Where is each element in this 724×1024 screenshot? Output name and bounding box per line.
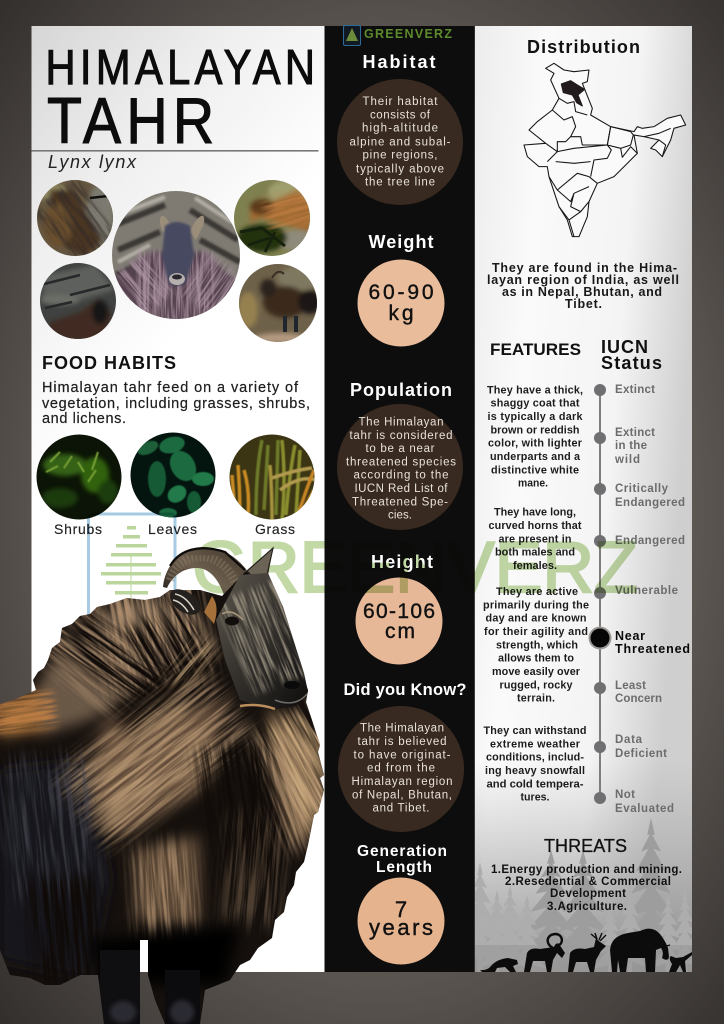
photo: grass bbox=[229, 434, 316, 520]
circle: habitat text: pine regions, bbox=[362, 149, 438, 161]
text: distribution description: Tibet. bbox=[565, 297, 602, 311]
circle: population text: to be a near bbox=[366, 443, 435, 455]
divider under title bbox=[32, 150, 318, 152]
logo: Greenverz bbox=[344, 26, 452, 46]
heading: weight: Weight bbox=[368, 232, 434, 252]
text: feature activity: They are active bbox=[496, 586, 578, 598]
circle: generation length value: 7 bbox=[395, 897, 407, 922]
soft colour masses bbox=[0, 600, 322, 980]
text: food habits description: and lichens. bbox=[42, 411, 126, 427]
text: feature activity: rugged, rocky bbox=[500, 679, 572, 691]
goat body and mane bbox=[0, 558, 324, 1024]
circle: height value bbox=[356, 578, 442, 664]
text: feature activity: primarily during the bbox=[483, 599, 589, 611]
chart: IUCN status timeline: Not bbox=[615, 789, 635, 801]
chart: IUCN status timeline: Endangered bbox=[615, 535, 685, 547]
text: feature activity: day and are known bbox=[486, 613, 586, 625]
heading: IUCN status: Status bbox=[601, 353, 662, 373]
circle: generation length value: years bbox=[369, 915, 433, 940]
fur streak layers bbox=[0, 590, 324, 982]
title bbox=[46, 40, 315, 157]
text: feature coat: mane. bbox=[518, 478, 548, 490]
heading: distribution: Distribution bbox=[527, 37, 640, 57]
belly shadow bbox=[90, 925, 240, 985]
text: feature weather: ing heavy snowfall bbox=[485, 765, 585, 777]
chart: IUCN status timeline: in the bbox=[615, 440, 647, 452]
watermark: Greenverz logo and wordmark: GREENVERZ bbox=[192, 528, 638, 608]
chart: IUCN status timeline: Critically bbox=[615, 483, 669, 495]
circle: habitat text: Their habitat bbox=[362, 96, 438, 108]
chart: IUCN status timeline: Concern bbox=[615, 693, 662, 705]
text: feature activity: strength, which bbox=[496, 639, 578, 651]
text: feature horns bbox=[488, 507, 582, 572]
photo: tahr head close-up bbox=[37, 180, 113, 256]
text: feature coat: shaggy coat that bbox=[490, 398, 580, 410]
chart: IUCN status timeline: Deficient bbox=[615, 748, 667, 760]
heading: generation length bbox=[357, 843, 447, 876]
circle: generation length value bbox=[358, 878, 444, 964]
chart: IUCN status timeline: Evaluated bbox=[615, 803, 674, 815]
text: feature weather: and cold tempera- bbox=[486, 778, 584, 790]
title: TAHR bbox=[47, 85, 214, 157]
heading: threats: THREATS bbox=[544, 836, 627, 856]
circle: population text bbox=[337, 404, 463, 530]
photo: shrubs bbox=[36, 434, 122, 520]
circle: habitat text: the tree line bbox=[365, 177, 435, 189]
text: feature weather: extreme weather bbox=[490, 738, 581, 750]
circle: did you know text: ed from the bbox=[367, 763, 435, 775]
text: feature activity bbox=[483, 586, 589, 705]
chart: IUCN status timeline: wild bbox=[614, 454, 640, 466]
goat head bbox=[216, 573, 314, 710]
circle: habitat text: alpine and subal- bbox=[350, 137, 451, 149]
circle: weight value bbox=[358, 260, 444, 346]
goat face details bbox=[204, 596, 307, 709]
heading: did you know: Did you Know? bbox=[344, 681, 466, 699]
circle: weight value: kg bbox=[388, 302, 414, 325]
chart: IUCN status timeline: Vulnerable bbox=[615, 585, 678, 597]
text: food habits description: Himalayan tahr feed on a variety of bbox=[42, 380, 299, 396]
text: feature coat: distinctive white bbox=[491, 464, 579, 476]
text: threats list: 1.Energy production and mining. bbox=[491, 864, 682, 876]
text: feature horns: are present in bbox=[498, 533, 572, 545]
photo: tahr browsing on foliage bbox=[234, 180, 310, 256]
heading: food habits: FOOD HABITS bbox=[42, 353, 176, 373]
circle: did you know text: Himalayan region bbox=[352, 776, 452, 788]
chart: IUCN status timeline: Extinct bbox=[615, 384, 655, 396]
heading: generation length: Length bbox=[376, 859, 432, 876]
text: feature weather: tures. bbox=[520, 792, 550, 804]
chart: IUCN status timeline: Least bbox=[615, 680, 646, 692]
text: feature activity: terrain. bbox=[517, 693, 555, 705]
text: feature activity: for their agility and bbox=[484, 626, 588, 638]
circle: did you know text: and Tibet. bbox=[372, 803, 430, 815]
circle: height value: cm bbox=[385, 620, 415, 643]
scientific name: Lynx lynx bbox=[48, 152, 137, 172]
circle: height value: 60-106 bbox=[363, 600, 435, 623]
chart: IUCN status timeline bbox=[588, 384, 690, 815]
circle: population text: according to the bbox=[354, 470, 448, 482]
text: threats list: Development bbox=[550, 888, 626, 900]
label: food names bbox=[54, 521, 295, 537]
photo: tahr portrait bbox=[112, 191, 240, 319]
label: food names: Grass bbox=[255, 521, 295, 537]
circle: population text: cies. bbox=[388, 510, 412, 522]
text: feature horns: They have long, bbox=[494, 507, 576, 519]
circle: population text: threatened species bbox=[346, 456, 456, 468]
label: food names: Shrubs bbox=[54, 521, 102, 537]
text: feature horns: both males and bbox=[495, 547, 575, 559]
text: feature weather bbox=[484, 725, 586, 804]
circle: did you know text: tahr is believed bbox=[358, 736, 446, 748]
goat legs bbox=[100, 950, 200, 1024]
text: feature coat: underparts and a bbox=[490, 451, 581, 463]
chart: IUCN status timeline: Near bbox=[615, 629, 645, 643]
circle: did you know text: The Himalayan bbox=[360, 723, 444, 735]
circle: population text: The Himalayan bbox=[358, 416, 444, 428]
label: food names: Leaves bbox=[148, 521, 197, 537]
illustration: wildlife silhouettes bbox=[480, 929, 692, 972]
circle: did you know text: of Nepal, Bhutan, bbox=[352, 789, 452, 801]
text: feature weather: conditions, includ- bbox=[486, 752, 584, 764]
circle: habitat text: consists of bbox=[370, 109, 431, 121]
logo: Greenverz: GREENVERZ bbox=[364, 27, 452, 41]
circle: habitat text: typically above bbox=[356, 163, 444, 175]
panel: distribution, features, status and threats column bbox=[475, 26, 692, 972]
circle: population text: Threatened Spe- bbox=[352, 496, 448, 508]
text: threats list: 3.Agriculture. bbox=[547, 901, 627, 913]
text: distribution description: They are found in the Hima- bbox=[492, 261, 677, 275]
goat horn bbox=[163, 547, 248, 602]
chart: IUCN status timeline: Extinct bbox=[615, 427, 655, 439]
heading: IUCN status: IUCN bbox=[601, 337, 648, 357]
photo: tahr against dark rock bbox=[38, 262, 118, 342]
heading: features: FEATURES bbox=[490, 340, 581, 359]
text: feature activity: move easily over bbox=[492, 666, 581, 678]
text: feature coat: color, with lighter bbox=[488, 438, 583, 450]
text: distribution description: as in Nepal, Bhutan, and bbox=[502, 285, 662, 299]
chart: IUCN status timeline: Data bbox=[615, 734, 643, 746]
goat second horn bbox=[247, 548, 273, 582]
text: threats list: 2.Resedential & Commercial bbox=[505, 876, 671, 888]
text: feature activity: allows them to bbox=[498, 653, 574, 665]
chart: IUCN status timeline: Endangered bbox=[615, 497, 685, 509]
chart: IUCN status timeline: Threatened bbox=[615, 642, 690, 656]
circle: did you know text bbox=[338, 706, 464, 832]
circle: weight value: 60-90 bbox=[368, 281, 434, 304]
text: feature horns: curved horns that bbox=[488, 520, 582, 532]
photo: leaves bbox=[130, 432, 216, 518]
heading: habitat: Habitat bbox=[362, 52, 436, 72]
text: food habits description bbox=[42, 380, 310, 427]
text: feature coat: brown or reddish bbox=[490, 424, 580, 436]
heading: generation length: Generation bbox=[357, 843, 447, 860]
watermark: Greenverz logo and wordmark bbox=[88, 514, 638, 644]
heading: IUCN status bbox=[601, 337, 662, 373]
map: India with Himalayan range shaded bbox=[524, 63, 686, 237]
illustration: Himalayan tahr bbox=[0, 546, 324, 1024]
circle: habitat text bbox=[337, 79, 463, 205]
heading: height: Height bbox=[371, 552, 433, 572]
circle: population text: IUCN Red List of bbox=[354, 483, 448, 495]
text: feature horns: females. bbox=[513, 560, 557, 572]
panel: left identity and food column bbox=[32, 26, 324, 972]
text: feature weather: They can withstand bbox=[484, 725, 586, 737]
text: distribution description bbox=[487, 261, 679, 311]
photo: full-body tahr bbox=[238, 263, 322, 343]
circle: did you know text: to have originat- bbox=[354, 749, 451, 761]
goat ear bbox=[165, 584, 205, 620]
heading: population: Population bbox=[350, 380, 452, 400]
text: food habits description: vegetation, including grasses, shrubs, bbox=[42, 396, 310, 412]
panel: central facts column bbox=[324, 26, 474, 972]
circle: population text: tahr is considered bbox=[350, 430, 452, 442]
text: distribution description: layan region of India, as well bbox=[487, 273, 679, 287]
text: feature coat bbox=[487, 384, 583, 490]
illustration: forest silhouette bbox=[475, 818, 692, 972]
text: feature coat: They have a thick, bbox=[487, 384, 583, 396]
text: threats list bbox=[491, 864, 682, 913]
title: HIMALAYAN bbox=[46, 40, 315, 95]
text: feature coat: is typically a dark bbox=[488, 411, 583, 423]
circle: habitat text: high-altitude bbox=[362, 123, 438, 135]
